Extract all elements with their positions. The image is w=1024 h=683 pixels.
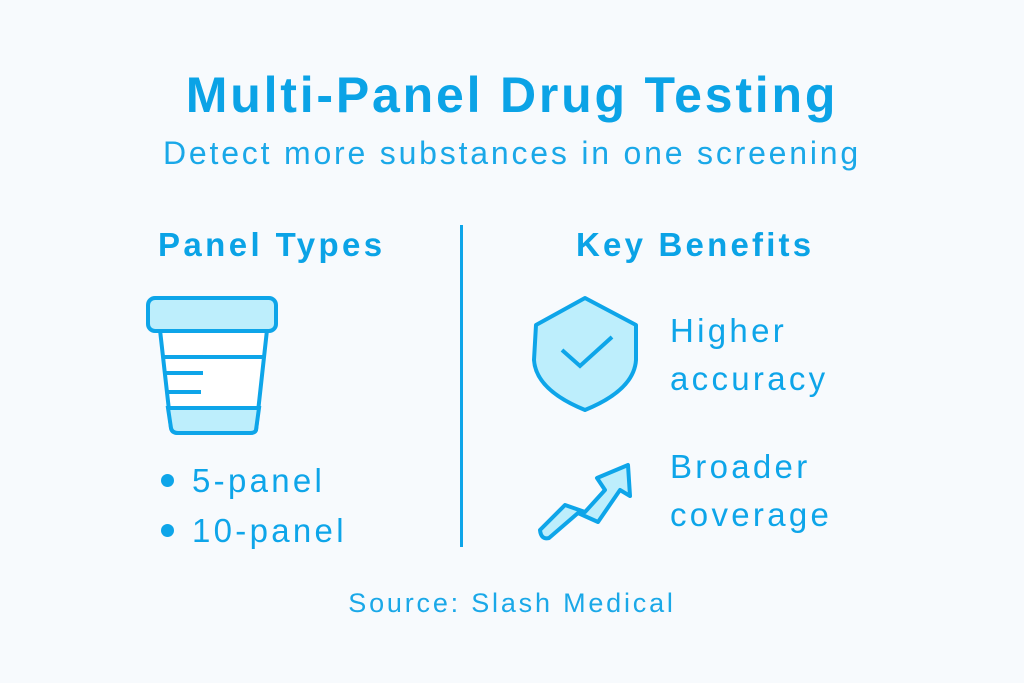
text: broader coverage [670,448,832,533]
list: panel types [161,462,347,549]
icon: shield [532,296,638,412]
subtitle: Detect more substances in one screening [163,135,861,171]
text: broader coverage: coverage [670,496,832,533]
text: higher accuracy: Higher [670,312,787,349]
text: higher accuracy [670,312,828,397]
heading: key benefits: Key Benefits [576,226,814,263]
source: Source: Slash Medical [348,588,676,618]
divider [460,225,463,547]
text: higher accuracy: accuracy [670,360,828,397]
list: panel types: 10-panel [192,512,347,549]
icon: trending arrow [538,462,632,540]
title: Multi-Panel Drug Testing [186,67,838,123]
heading: panel types: Panel Types [158,226,386,263]
text: broader coverage: Broader [670,448,811,485]
list: panel types: 5-panel [192,462,325,499]
icon: specimen cup [146,296,278,435]
